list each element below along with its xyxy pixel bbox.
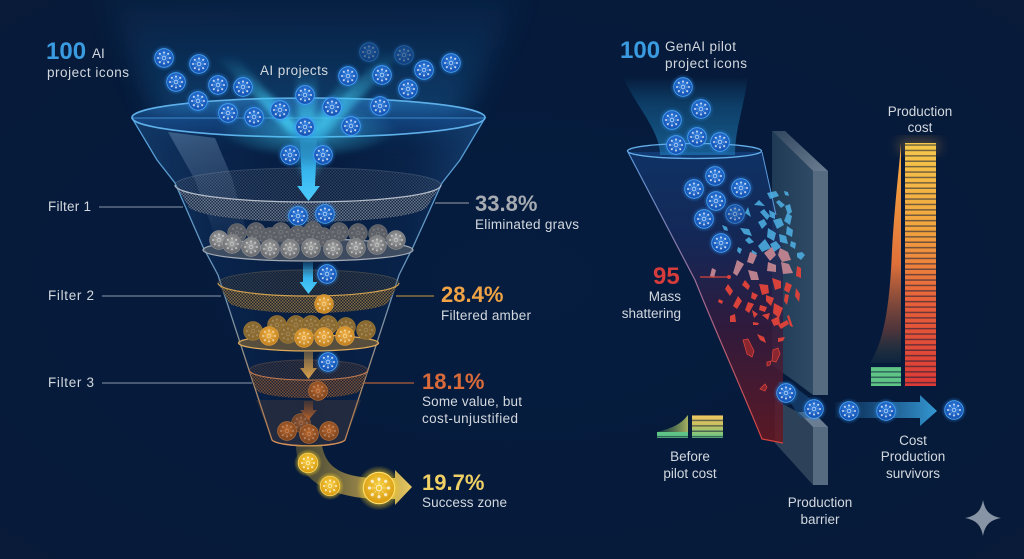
amber filtered coins: [244, 316, 375, 347]
glass highlight streak: [168, 132, 252, 250]
filter 1 mesh: [175, 168, 441, 222]
funnel labels: AI: [92, 46, 105, 61]
funnel labels: AI projects: [260, 63, 328, 78]
filter 2 label: Filter 2: [48, 288, 94, 303]
blue pilot coins: [659, 74, 754, 256]
grey eliminated plate: [203, 239, 413, 261]
amber coin in filter 2: [315, 295, 333, 313]
funnel right edge: [762, 152, 776, 215]
survivor coin stream: [773, 380, 827, 422]
funnel labels: Some value, but: [422, 394, 522, 409]
grey eliminated coins: [210, 222, 405, 258]
barrier labels: cost: [908, 120, 933, 135]
copper coin in filter 3: [309, 382, 327, 400]
filter 2 mesh: [218, 270, 399, 313]
arrow: into filter 3: [300, 352, 317, 379]
label: before pilot cost: Before: [670, 449, 710, 464]
heading: 100 AI project icons: 100: [46, 38, 86, 65]
dark red outlined shards: [743, 339, 780, 391]
barrier labels: shattering: [622, 306, 681, 321]
chart: production cost bars: [870, 140, 939, 386]
pink transition fragments: [710, 247, 793, 280]
label: cost production survivors: Cost: [899, 433, 927, 448]
coins entering filter 1: [277, 142, 336, 168]
funnel top rim: [132, 98, 485, 137]
funnel labels: Success zone: [422, 495, 507, 510]
incoming blue project coins: [151, 39, 464, 140]
icon: four-point star: [965, 500, 1001, 536]
arrow: below filter 3: [300, 401, 317, 420]
stat: 95 mass shattering: 95: [653, 263, 680, 290]
coins passing filter 1: [285, 201, 338, 229]
funnel labels: Filtered amber: [441, 308, 532, 323]
label: production barrier: Production: [788, 495, 852, 510]
filter 3 mesh: [249, 360, 368, 398]
barrier labels: project icons: [665, 56, 747, 71]
funnel labels: [46, 38, 579, 510]
barrier labels: pilot cost: [663, 466, 717, 481]
filter 3 label: Filter 3: [48, 375, 94, 390]
funnel glass body: [132, 118, 485, 446]
panel: GenAI pilot barrier: [623, 74, 967, 485]
amber plate: [238, 335, 378, 351]
copper funnel base and coins: [256, 400, 361, 446]
funnel labels: Eliminated gravs: [475, 217, 579, 232]
panel: AI project funnel: [90, 0, 535, 510]
stat: 33.8%: 33.8%: [475, 191, 537, 216]
barrier labels: GenAI pilot: [665, 39, 736, 54]
funnel body: [628, 152, 783, 443]
stat: 18.1%: 18.1%: [422, 369, 484, 394]
light cone above funnel: [90, 0, 535, 125]
stat: 19.7%: 19.7%: [422, 470, 484, 495]
filter 1 label: Filter 1: [48, 199, 91, 214]
coin above filter 3: [315, 349, 341, 375]
funnel labels: cost-unjustified: [422, 411, 518, 426]
stat: 28.4%: 28.4%: [441, 282, 503, 307]
label: production cost: Production: [888, 104, 952, 119]
shattered red fragments: [718, 266, 801, 343]
light beams converging into the funnel: [215, 50, 405, 175]
production barrier wall: [772, 131, 828, 485]
arrow: into filter 1: [297, 140, 320, 201]
funnel rim: [628, 144, 762, 158]
shattered blue fragments: [722, 191, 805, 260]
chart: before pilot cost bars: [657, 415, 723, 438]
gold success arrow: [294, 445, 412, 510]
coin above filter 2: [314, 261, 340, 287]
barrier labels: barrier: [800, 512, 840, 527]
incoming light stream: [623, 77, 748, 155]
barrier labels: Mass: [649, 289, 681, 304]
barrier labels: [620, 37, 952, 527]
arrow: into filter 2: [300, 262, 318, 294]
barrier labels: survivors: [886, 466, 940, 481]
barrier labels: Production: [881, 449, 945, 464]
heading: 100 GenAI pilot project icons: 100: [620, 37, 660, 64]
survivors arrow: [835, 395, 967, 426]
funnel labels: project icons: [47, 65, 129, 80]
funnel left edge: [628, 152, 783, 443]
